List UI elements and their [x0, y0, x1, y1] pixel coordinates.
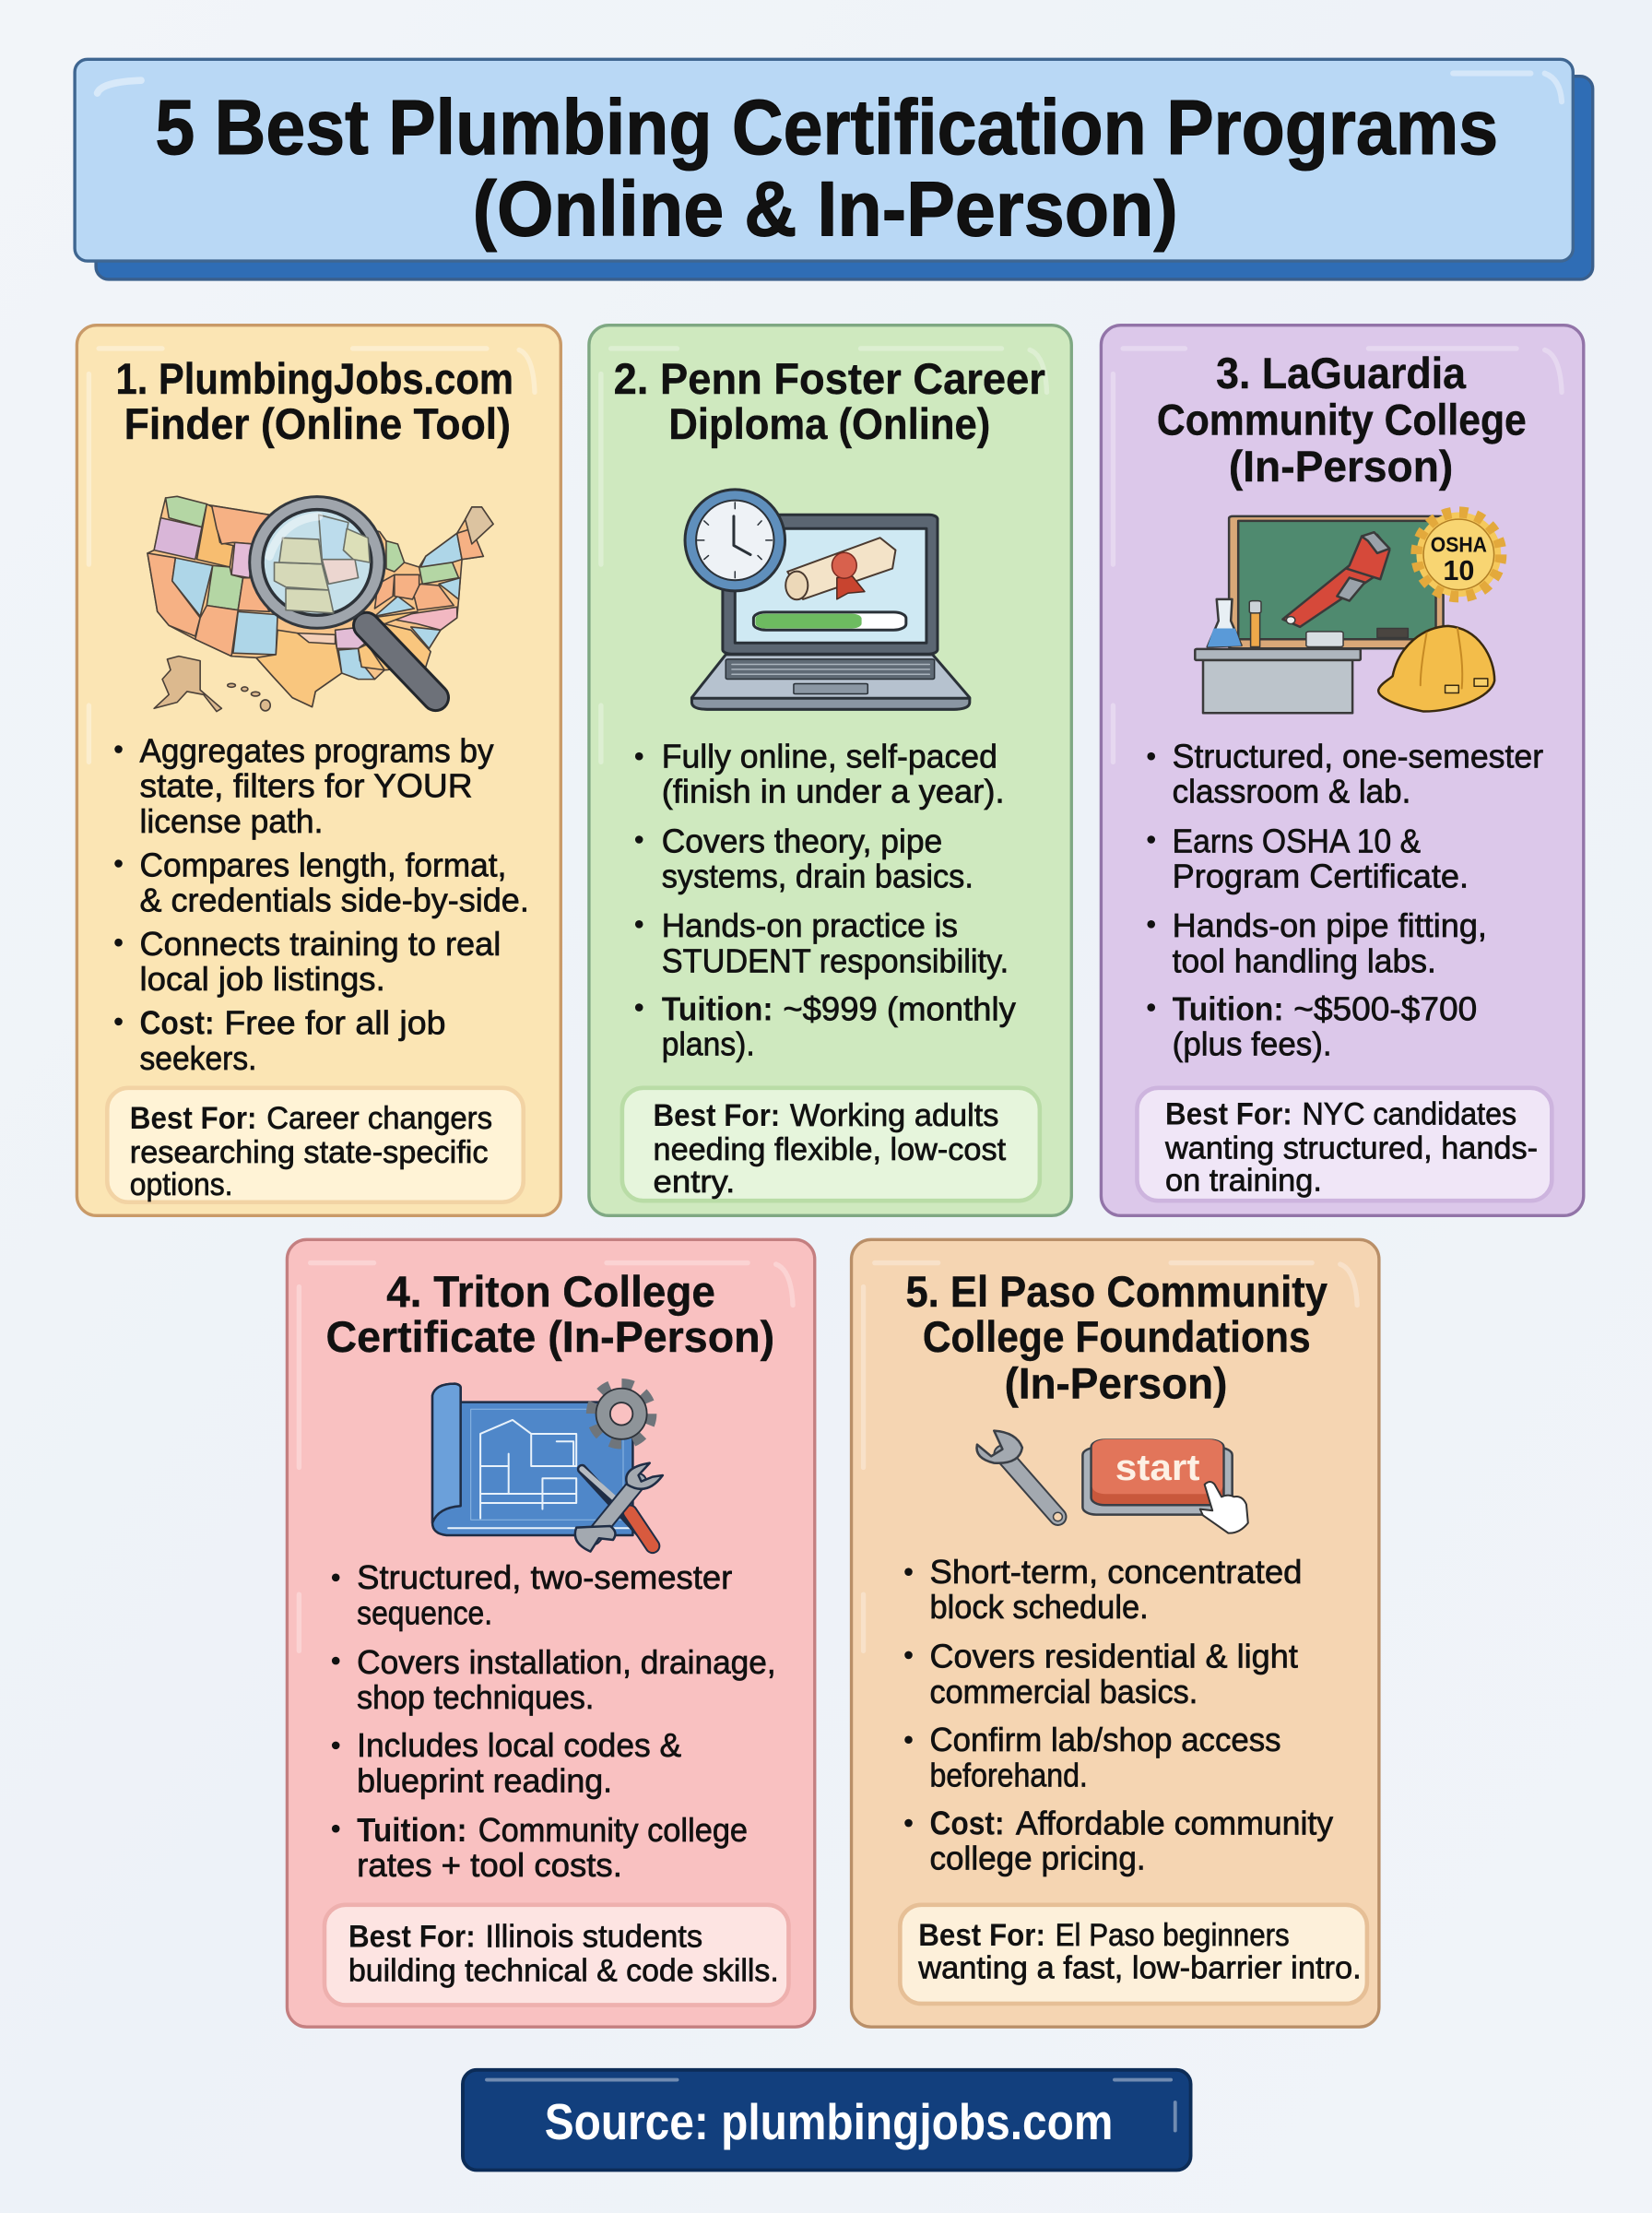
heading [905, 1268, 1328, 1408]
bullet: fully online [635, 737, 1005, 811]
bullet: tuition: Community college [478, 1811, 748, 1849]
icon: blueprint with gear, wrench and screwdriver [432, 1384, 663, 1552]
bullet: aggregates programs: license path. [140, 802, 323, 840]
bullet: earns OSHA [1147, 822, 1469, 895]
bullet: covers installation: Covers installation, drainage, [357, 1643, 776, 1681]
callout: best for: Best For: [348, 1920, 476, 1955]
bullet: hands-on: Hands-on practice is [662, 906, 958, 944]
callout: best for: options. [130, 1167, 233, 1202]
bullet: aggregates programs [114, 731, 494, 840]
heading: Community College [1157, 396, 1527, 444]
bullet: short-term [904, 1553, 1302, 1626]
bullet: covers theory: systems, drain basics. [662, 858, 974, 895]
bullet: tuition: rates + tool costs. [357, 1846, 622, 1884]
bullet: tuition: ~$500-$700 [1293, 989, 1477, 1027]
icon: wrench and start button with pointer [977, 1431, 1248, 1533]
heading: 5. El Paso Community [905, 1268, 1328, 1317]
panel: card 4 Triton College [287, 1239, 815, 2027]
callout: best for: researching state-specific [130, 1135, 488, 1170]
bullet: structured: classroom & lab. [1173, 773, 1410, 811]
bullet list [635, 737, 1016, 1063]
callout: best for: entry. [654, 1165, 735, 1200]
heading: College Foundations [923, 1313, 1311, 1362]
callout: best for [900, 1905, 1367, 2004]
icon: wrench and start button with pointer: start [1115, 1448, 1200, 1488]
callout: best for [622, 1088, 1040, 1201]
callout: best for: Illinois students [485, 1920, 702, 1955]
bullet: hands-on [635, 906, 1009, 979]
heading: (In-Person) [1005, 1359, 1227, 1408]
title text [155, 84, 1498, 253]
bullet: fully online: Fully online, self-paced [662, 737, 997, 775]
bullet: hands-on [1147, 906, 1487, 979]
bullet: short-term: block schedule. [929, 1588, 1149, 1626]
icon: OSHA 10 badge: OSHA [1431, 532, 1487, 556]
heading [115, 355, 513, 449]
callout: best for: Best For: [130, 1101, 257, 1136]
callout: best for: Best For: [918, 1918, 1045, 1953]
bullet: compares: & credentials side-by-side. [140, 882, 529, 919]
bullet: cost: Cost: [140, 1004, 215, 1042]
bullet list [332, 1558, 776, 1884]
icon: chalkboard with wrench, flask, desk, hard hat and OSHA badge [1195, 512, 1501, 713]
bullet: tuition: Tuition: [1173, 989, 1284, 1027]
bullet: structured [332, 1558, 732, 1631]
bullet: cost: Affordable community [1016, 1804, 1333, 1841]
bullet: compares: Compares length, format, [140, 846, 506, 883]
bullet list [114, 731, 529, 1077]
icon: US map with magnifying glass [148, 496, 493, 712]
title banner [75, 59, 1593, 279]
heading [1157, 349, 1527, 491]
bullet: short-term: Short-term, concentrated [929, 1553, 1302, 1591]
bullet: cost: seekers. [140, 1039, 257, 1077]
bullet: covers installation: shop techniques. [357, 1678, 594, 1716]
bullet: tuition: Tuition: [662, 989, 773, 1027]
icon: laptop with diploma and clock [685, 490, 970, 709]
heading: 4. Triton College [386, 1268, 715, 1317]
bullet: connects [114, 925, 501, 998]
bullet: structured: Structured, one-semester [1173, 737, 1543, 775]
heading [614, 355, 1045, 449]
callout: best for: building technical & code skills. [348, 1953, 779, 1988]
bullet: cost: Free for all job [224, 1004, 446, 1042]
bullet: tuition [635, 989, 1016, 1063]
callout: best for: Career changers [266, 1101, 492, 1136]
panel: card 5 El Paso Community College [852, 1239, 1379, 2027]
bullet: tuition: Tuition: [357, 1811, 467, 1849]
bullet: confirm lab: beforehand. [929, 1756, 1088, 1793]
bullet: hands-on: tool handling labs. [1173, 941, 1436, 979]
bullet: tuition [332, 1811, 748, 1884]
callout: best for: El Paso beginners [1056, 1918, 1290, 1953]
bullet list [904, 1553, 1333, 1877]
bullet: covers theory: Covers theory, pipe [662, 822, 942, 859]
callout: best for: on training. [1165, 1164, 1322, 1199]
callout: best for: wanting structured, hands- [1164, 1130, 1538, 1166]
callout: best for: Best For: [1165, 1097, 1292, 1132]
bullet: tuition: plans). [662, 1025, 755, 1063]
bullet: cost: college pricing. [929, 1840, 1146, 1877]
bullet: confirm lab [904, 1721, 1281, 1793]
callout: best for: needing flexible, low-cost [654, 1132, 1007, 1167]
icon: gear [592, 1384, 651, 1443]
bullet: tuition: (plus fees). [1173, 1025, 1332, 1063]
bullet: residential [904, 1638, 1298, 1710]
bullet: connects: Connects training to real [140, 925, 501, 963]
bullet: covers theory [635, 822, 974, 895]
bullet: cost: Cost: [929, 1804, 1005, 1841]
bullet: earns OSHA: Earns OSHA 10 & [1173, 822, 1421, 859]
bullet: structured: Structured, two-semester [357, 1558, 732, 1596]
callout: best for: wanting a fast, low-barrier intro. [917, 1950, 1362, 1985]
title text: 5 Best Plumbing Certification Programs [155, 84, 1498, 171]
icon: OSHA 10 badge [1416, 512, 1501, 597]
callout: best for [324, 1905, 788, 2005]
title text: (Online & In-Person) [473, 166, 1178, 253]
bullet: fully online: (finish in under a year). [662, 773, 1005, 811]
heading [326, 1268, 774, 1362]
panel: card 3 LaGuardia [1101, 325, 1584, 1215]
bullet: structured: sequence. [357, 1593, 492, 1631]
bullet: tuition: ~$999 (monthly [783, 989, 1016, 1027]
bullet: earns OSHA: Program Certificate. [1173, 858, 1469, 895]
source footer [463, 2070, 1191, 2170]
bullet: covers installation [332, 1643, 776, 1716]
icon: OSHA 10 badge: 10 [1443, 555, 1474, 586]
bullet: local codes: blueprint reading. [357, 1761, 612, 1799]
bullet: hands-on: Hands-on pipe fitting, [1173, 906, 1487, 944]
callout: best for: Best For: [654, 1098, 780, 1133]
bullet: cost [904, 1804, 1333, 1877]
bullet: aggregates programs: Aggregates programs by [140, 731, 494, 769]
bullet: connects: local job listings. [140, 960, 385, 998]
callout: best for [107, 1088, 524, 1202]
bullet: aggregates programs: state, filters for YOUR [140, 767, 473, 805]
heading: (In-Person) [1229, 443, 1453, 491]
bullet: confirm lab: Confirm lab/shop access [929, 1721, 1281, 1758]
bullet: structured [1147, 737, 1543, 811]
bullet list [1147, 737, 1543, 1063]
bullet: residential: commercial basics. [929, 1673, 1198, 1710]
bullet: tuition [1147, 989, 1477, 1063]
bullet: local codes: Includes local codes & [357, 1726, 681, 1764]
heading: 3. LaGuardia [1216, 349, 1467, 398]
panel: card 1 PlumbingJobs.com Finder [77, 325, 560, 1215]
bullet: compares [114, 846, 529, 919]
bullet: hands-on: STUDENT responsibility. [662, 941, 1009, 979]
bullet: local codes [332, 1726, 681, 1799]
bullet: cost [114, 1004, 446, 1077]
heading: Diploma (Online) [668, 400, 990, 449]
heading: Finder (Online Tool) [124, 400, 511, 449]
heading: 1. PlumbingJobs.com [115, 355, 513, 404]
heading: Certificate (In-Person) [326, 1313, 774, 1362]
callout: best for [1137, 1088, 1552, 1201]
heading: 2. Penn Foster Career [614, 355, 1045, 404]
source footer: Source: plumbingjobs.com [545, 2093, 1113, 2150]
panel: card 2 Penn Foster [589, 325, 1071, 1215]
callout: best for: NYC candidates [1302, 1097, 1516, 1132]
bullet: residential: Covers residential & light [929, 1638, 1298, 1675]
callout: best for: Working adults [790, 1098, 998, 1133]
